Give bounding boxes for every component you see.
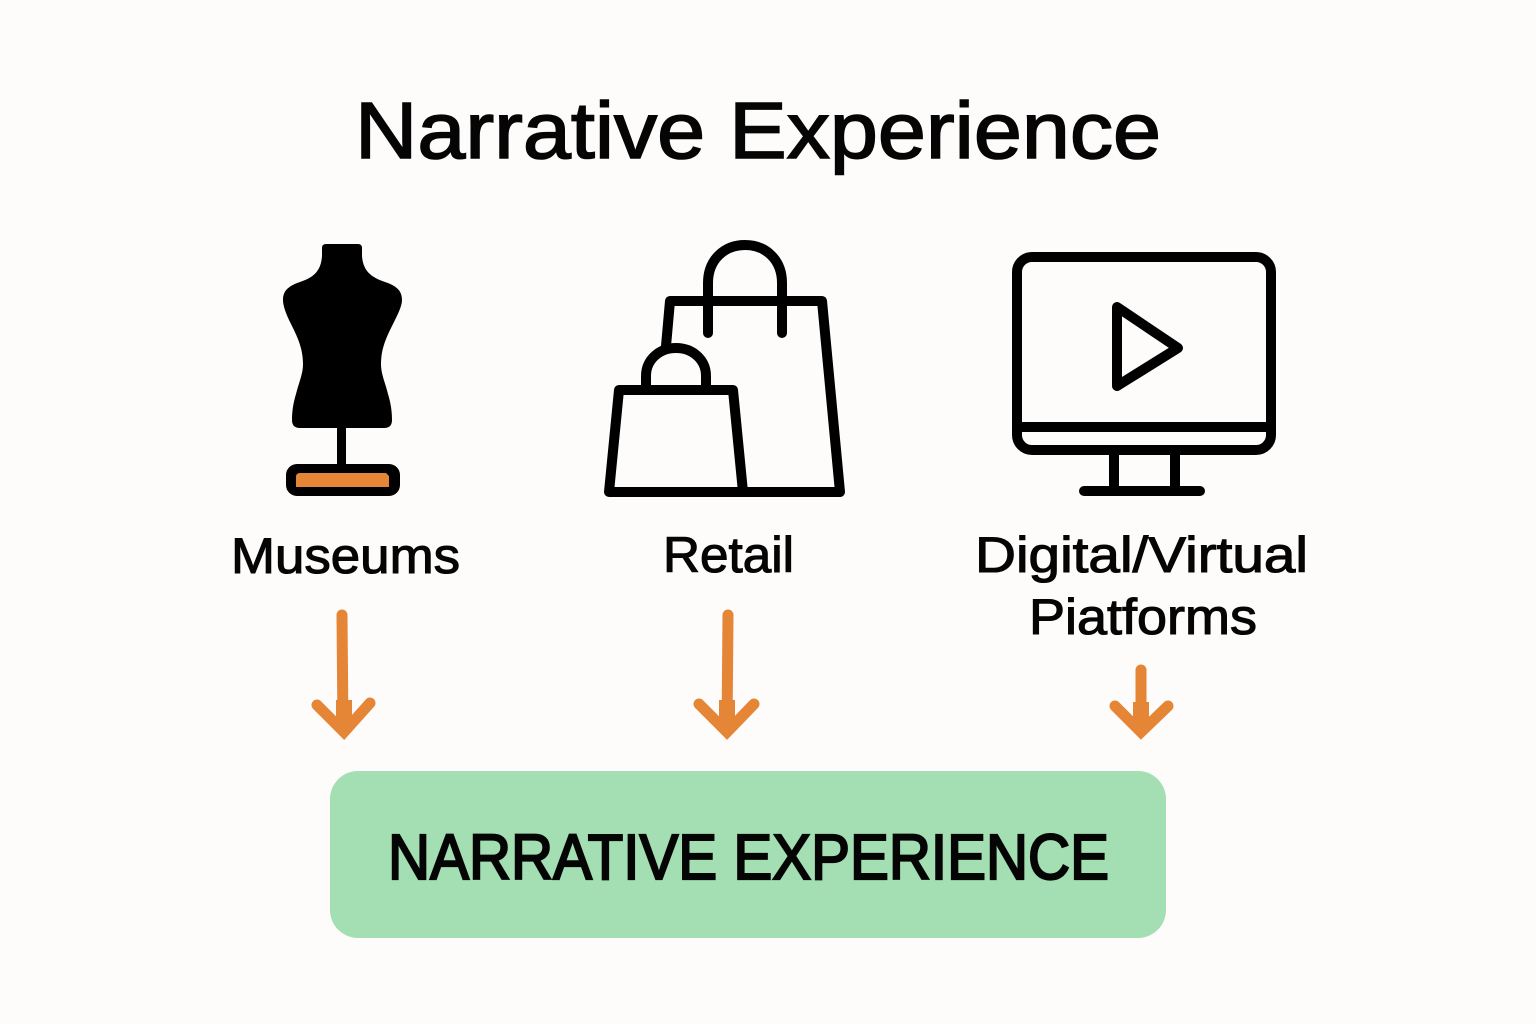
label: Digital/Virtual Piatforms: Piatforms <box>1029 589 1257 645</box>
icon: shopping bags <box>609 245 840 492</box>
arrow: digital platforms to narrative experience <box>1115 670 1168 732</box>
arrow: museums to narrative experience <box>317 615 370 732</box>
icon: monitor with play button <box>1017 257 1271 491</box>
label: Retail: Retail <box>663 527 794 583</box>
label: Digital/Virtual Piatforms: Digital/Virtual <box>975 527 1308 583</box>
label: Museums: Museums <box>231 528 460 584</box>
label: Digital/Virtual Piatforms <box>975 527 1308 645</box>
banner text: NARRATIVE EXPERIENCE <box>388 821 1109 893</box>
arrow: retail to narrative experience <box>699 615 754 732</box>
icon: mannequin <box>283 244 402 496</box>
panel: narrative experience banner <box>330 771 1166 938</box>
title: Narrative Experience <box>355 86 1161 175</box>
